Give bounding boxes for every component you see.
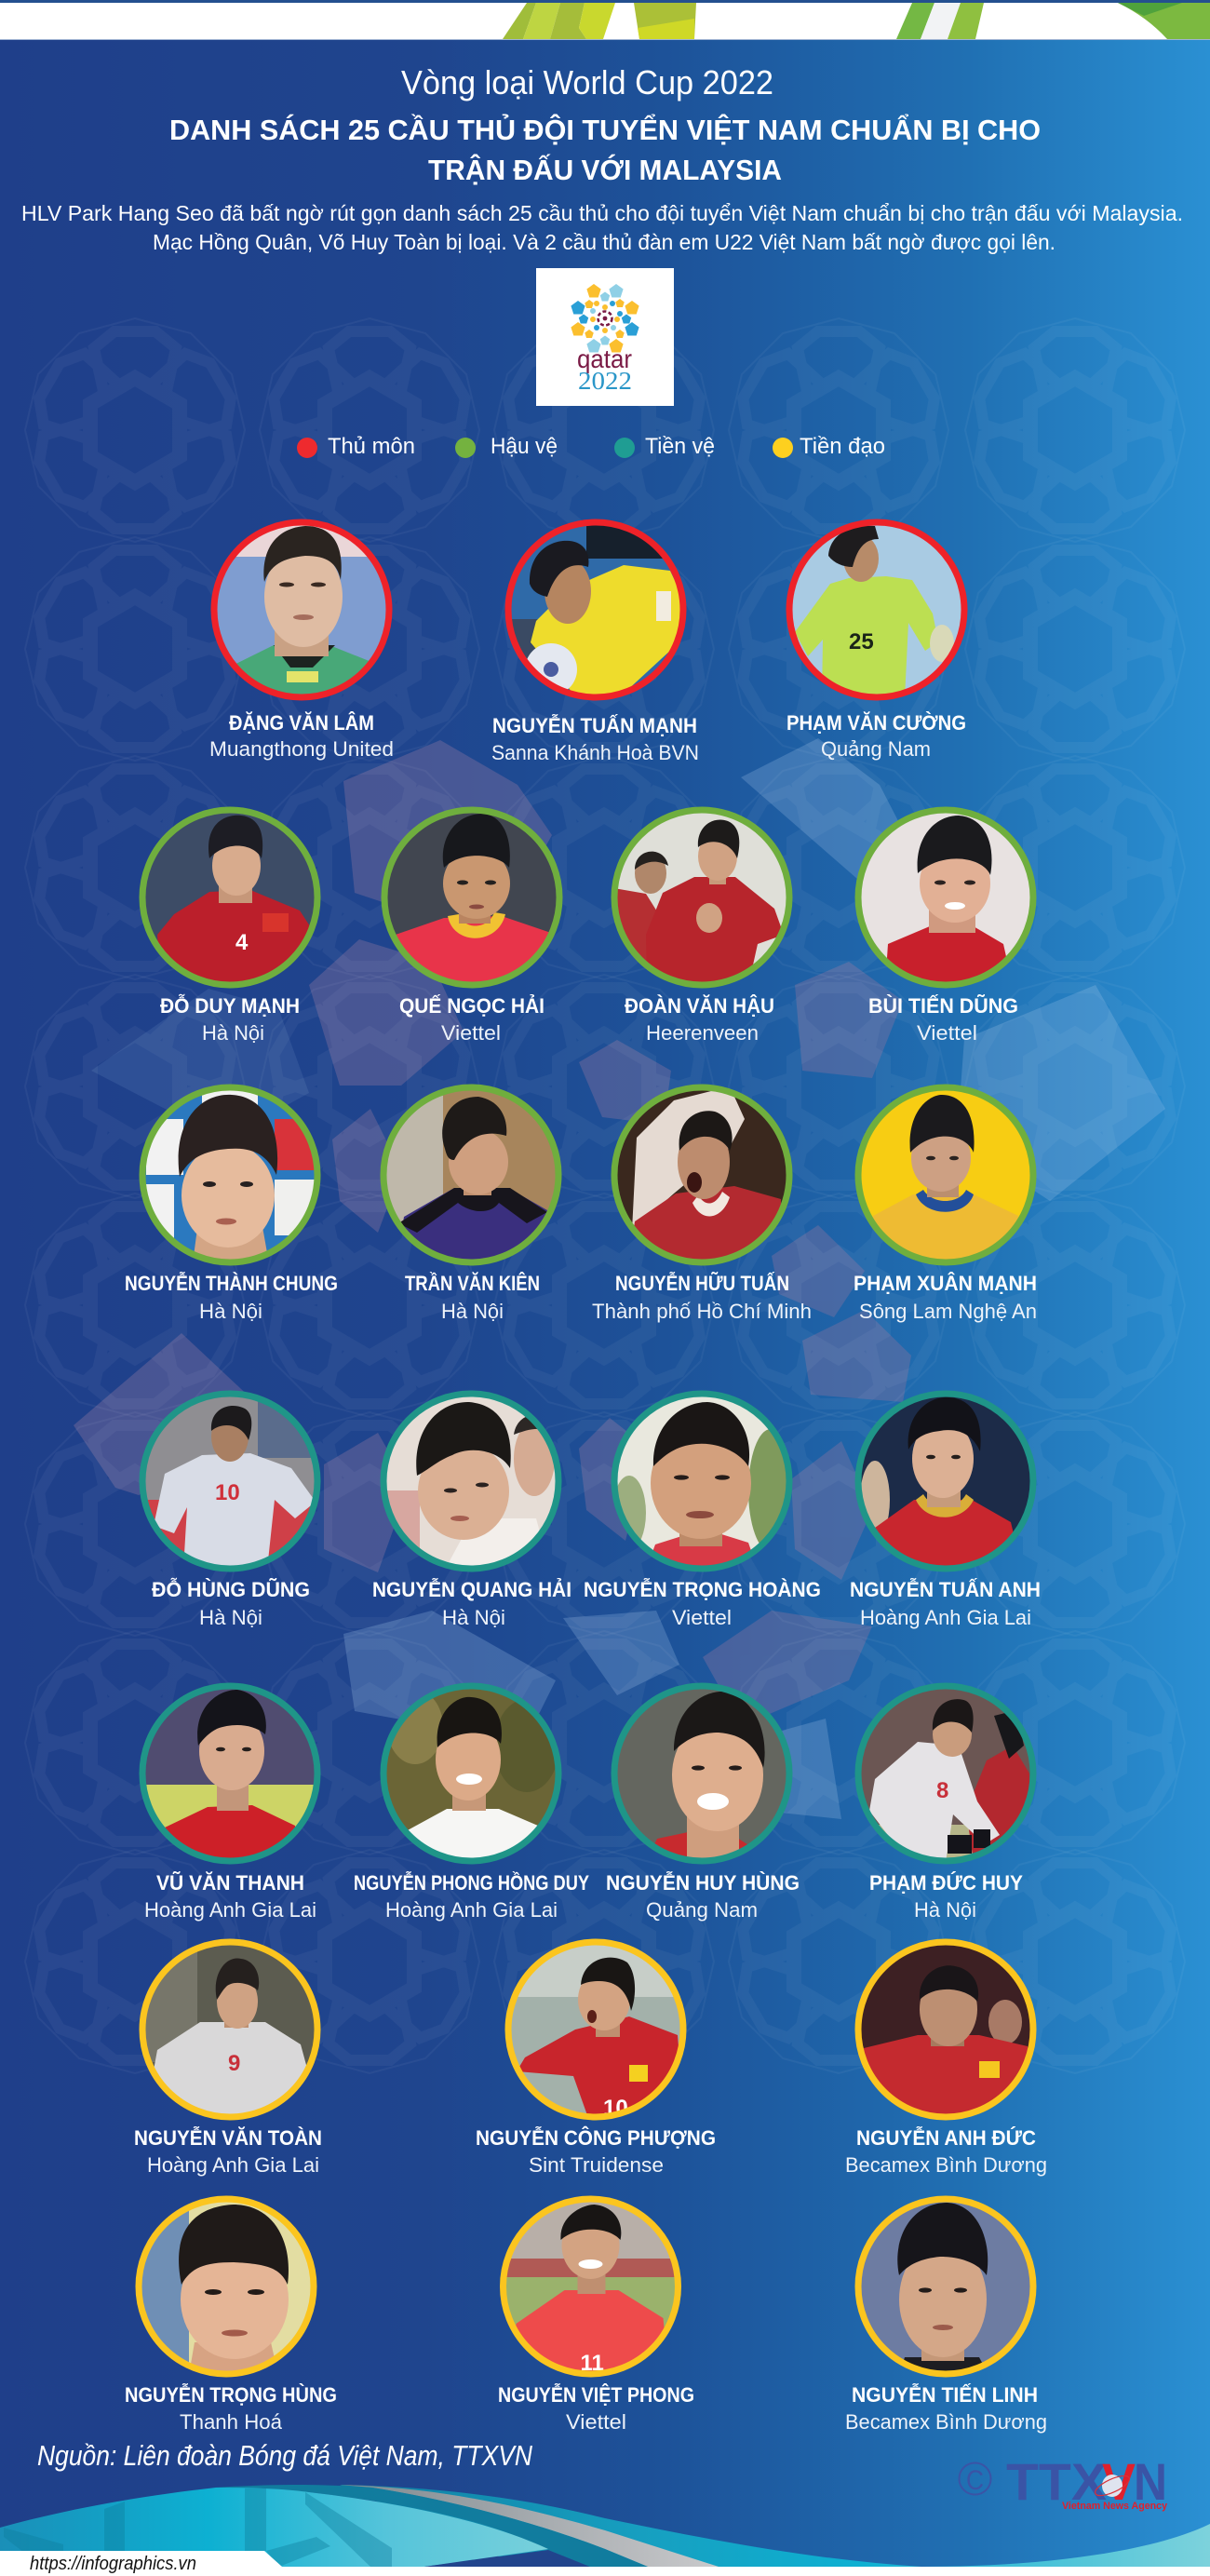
name: NGUYỄN TUẤN ANH xyxy=(850,1577,1041,1601)
player: Nguyễn Công Phượng xyxy=(476,1941,716,2177)
main heading: TRẬN ĐẤU VỚI MALAYSIA xyxy=(428,153,782,186)
photo: 8 xyxy=(936,1778,948,1803)
ring xyxy=(383,1087,558,1262)
name: ĐẶNG VĂN LÂM xyxy=(229,711,374,735)
intro paragraph xyxy=(21,201,1183,254)
ring xyxy=(383,1394,558,1569)
photo xyxy=(857,1685,1034,1862)
photo xyxy=(503,2198,679,2376)
club: Thành phố Hồ Chí Minh xyxy=(592,1300,812,1323)
player: Bùi Tiến Dũng xyxy=(857,809,1034,1045)
photo xyxy=(141,1685,318,1862)
club: Viettel xyxy=(917,1021,977,1045)
TTXVN logo xyxy=(959,2452,1168,2512)
Qatar 2022 logo: 2022 xyxy=(578,367,632,395)
photo xyxy=(612,1393,793,1570)
ring xyxy=(214,522,389,697)
main heading xyxy=(169,113,1041,186)
photo xyxy=(383,809,560,986)
ring xyxy=(614,1686,789,1861)
name: ĐOÀN VĂN HẬU xyxy=(625,994,774,1018)
name: QUẾ NGỌC HẢI xyxy=(399,994,544,1018)
main heading: DANH SÁCH 25 CẦU THỦ ĐỘI TUYỂN VIỆT NAM CHUẨN BỊ CHO xyxy=(169,113,1041,146)
TTXVN logo: TTX xyxy=(1006,2452,1107,2511)
name: NGUYỄN ANH ĐỨC xyxy=(856,2125,1036,2150)
legend: defender xyxy=(455,434,558,459)
player: Đỗ Hùng Dũng xyxy=(141,1393,318,1629)
club: Sông Lam Nghệ An xyxy=(859,1300,1037,1323)
source note: Nguồn: Liên đoàn Bóng đá Việt Nam, TTXVN xyxy=(37,2439,533,2472)
ring xyxy=(142,1087,317,1262)
photo xyxy=(383,1685,559,1862)
photo xyxy=(507,521,684,698)
photo xyxy=(857,2198,1034,2375)
club: Becamex Bình Dương xyxy=(845,2410,1047,2434)
Qatar 2022 logo: qatar xyxy=(577,344,632,373)
player: Nguyễn Trọng Hoàng xyxy=(584,1393,821,1629)
player: Nguyễn Phong Hồng Duy xyxy=(354,1685,589,1922)
name: NGUYỄN VIỆT PHONG xyxy=(498,2382,694,2407)
ring xyxy=(858,1087,1033,1262)
subtitle line: Vòng loại World Cup 2022 xyxy=(401,63,773,101)
club: Heerenveen xyxy=(646,1021,759,1045)
ring xyxy=(384,810,559,985)
name: TRẦN VĂN KIÊN xyxy=(405,1272,540,1295)
player: Phạm Văn Cường xyxy=(786,521,966,761)
ring xyxy=(858,810,1033,985)
ring xyxy=(858,2199,1033,2374)
faded logo watermark xyxy=(74,738,1165,1819)
club: Hà Nội xyxy=(202,1021,264,1045)
name: NGUYỄN QUANG HẢI xyxy=(372,1577,571,1601)
ring xyxy=(858,1942,1033,2117)
name: VŨ VĂN THANH xyxy=(156,1871,304,1895)
name: NGUYỄN THÀNH CHUNG xyxy=(125,1271,338,1295)
club: Hoàng Anh Gia Lai xyxy=(144,1898,316,1922)
legend: goalkeeper: Thủ môn xyxy=(328,434,415,459)
photo xyxy=(507,1941,684,2121)
background pattern xyxy=(25,318,1185,2073)
name: NGUYỄN VĂN TOÀN xyxy=(134,2125,322,2150)
club: Sint Truidense xyxy=(529,2153,664,2177)
photo xyxy=(383,1393,559,1570)
name: NGUYỄN HUY HÙNG xyxy=(606,1870,800,1895)
photo xyxy=(613,1086,790,1263)
photo: 10 xyxy=(603,2096,628,2121)
player: Nguyễn Tuấn Anh xyxy=(850,1393,1041,1629)
name: NGUYỄN TRỌNG HOÀNG xyxy=(584,1577,821,1601)
club: Viettel xyxy=(672,1606,732,1629)
photo xyxy=(213,521,390,698)
club: Hà Nội xyxy=(199,1606,262,1629)
photo: 10 xyxy=(215,1480,240,1505)
name: NGUYỄN CÔNG PHƯỢNG xyxy=(476,2125,716,2150)
name: PHẠM ĐỨC HUY xyxy=(869,1871,1023,1895)
player: Nguyễn Văn Toàn xyxy=(134,1941,322,2177)
ring xyxy=(858,1686,1033,1861)
ring xyxy=(614,810,789,985)
photo xyxy=(141,1086,318,1263)
footer strip with site URL: https://infographics.vn xyxy=(30,2554,196,2574)
TTXVN logo: Vietnam News Agency xyxy=(1062,2501,1168,2512)
club: Quảng Nam xyxy=(821,737,931,761)
intro paragraph: HLV Park Hang Seo đã bất ngờ rút gọn danh sách 25 cầu thủ cho đội tuyển Việt Nam chuẩn bị cho trận đấu với Malaysia. xyxy=(21,201,1183,225)
ring xyxy=(142,1942,317,2117)
legend: midfielder xyxy=(614,434,715,459)
photo xyxy=(141,1393,318,1570)
photo xyxy=(857,809,1034,986)
player: Nguyễn Anh Đức xyxy=(845,1941,1047,2177)
ring xyxy=(614,1394,789,1569)
player: Đoàn Văn Hậu xyxy=(613,809,790,1045)
player: Trần Văn Kiên xyxy=(383,1086,559,1323)
club: Hoàng Anh Gia Lai xyxy=(385,1898,558,1922)
photo xyxy=(383,1086,559,1263)
TTXVN logo: N xyxy=(1134,2452,1167,2511)
legend: defender: Hậu vệ xyxy=(491,434,558,459)
name: PHẠM VĂN CƯỜNG xyxy=(786,711,966,735)
club: Hoàng Anh Gia Lai xyxy=(147,2153,319,2177)
name: PHẠM XUÂN MẠNH xyxy=(854,1272,1037,1295)
player: Phạm Đức Huy xyxy=(857,1685,1034,1922)
name: ĐỖ DUY MẠNH xyxy=(160,993,300,1018)
club: Hà Nội xyxy=(199,1300,262,1323)
club: Hà Nội xyxy=(442,1606,505,1629)
player: Nguyễn Trọng Hùng xyxy=(125,2198,337,2434)
top white banner with green shapes xyxy=(0,0,1210,40)
photo: 9 xyxy=(228,2051,240,2076)
TTXVN logo: V xyxy=(1102,2452,1136,2511)
ring xyxy=(142,810,317,985)
player: Đặng Văn Lâm xyxy=(209,521,394,761)
photo: 25 xyxy=(849,629,874,654)
bottom wave decoration xyxy=(0,2485,1210,2567)
legend xyxy=(297,434,885,459)
player: Nguyễn Quang Hải xyxy=(372,1393,571,1629)
name: NGUYỄN PHONG HỒNG DUY xyxy=(354,1870,589,1895)
ring xyxy=(142,1686,317,1861)
name: BÙI TIẾN DŨNG xyxy=(868,994,1018,1018)
ring xyxy=(858,1394,1033,1569)
ring xyxy=(503,2199,678,2374)
club: Becamex Bình Dương xyxy=(845,2153,1047,2177)
photo xyxy=(141,1941,318,2118)
player: Nguyễn Hữu Tuấn xyxy=(592,1086,812,1323)
TTXVN logo: C xyxy=(966,2465,984,2496)
player: Phạm Xuân Mạnh xyxy=(854,1086,1037,1323)
club: Hà Nội xyxy=(441,1300,504,1323)
player: Nguyễn Việt Phong xyxy=(498,2198,694,2434)
player: Đỗ Duy Mạnh xyxy=(141,809,318,1045)
club: Quảng Nam xyxy=(646,1898,758,1922)
club: Viettel xyxy=(566,2410,626,2434)
footer strip with site URL xyxy=(0,2551,1210,2576)
club: Hà Nội xyxy=(914,1898,976,1922)
title xyxy=(169,63,1041,186)
ring xyxy=(139,2199,314,2374)
ring xyxy=(789,522,964,697)
photo: 4 xyxy=(235,930,249,955)
Qatar 2022 logo xyxy=(536,268,674,406)
name: NGUYỄN TRỌNG HÙNG xyxy=(125,2382,337,2407)
photo xyxy=(788,521,965,698)
photo: 11 xyxy=(581,2351,604,2376)
player: Nguyễn Huy Hùng xyxy=(606,1685,800,1922)
photo xyxy=(857,1086,1034,1263)
name: NGUYỄN TUẤN MẠNH xyxy=(492,713,697,737)
club: Sanna Khánh Hoà BVN xyxy=(491,741,699,764)
photo xyxy=(857,1941,1034,2118)
photo xyxy=(138,2198,315,2375)
player: Nguyễn Tuấn Mạnh xyxy=(491,521,699,764)
club: Hoàng Anh Gia Lai xyxy=(860,1606,1031,1629)
ring xyxy=(614,1087,789,1262)
legend: midfielder: Tiền vệ xyxy=(645,434,715,459)
ring xyxy=(508,1942,683,2117)
intro paragraph: Mạc Hồng Quân, Võ Huy Toàn bị loại. Và 2 cầu thủ đàn em U22 Việt Nam bất ngờ được gọi lên. xyxy=(153,230,1055,254)
legend: forward: Tiền đạo xyxy=(800,434,885,459)
ring xyxy=(383,1686,558,1861)
name: NGUYỄN TIẾN LINH xyxy=(852,2382,1038,2407)
ring xyxy=(142,1394,317,1569)
photo xyxy=(613,809,790,986)
name: NGUYỄN HỮU TUẤN xyxy=(615,1271,789,1295)
player: Nguyễn Tiến Linh xyxy=(845,2198,1047,2434)
player: Quế Ngọc Hải xyxy=(383,809,560,1045)
photo xyxy=(141,809,318,986)
player: Nguyễn Thành Chung xyxy=(125,1086,338,1323)
photo xyxy=(613,1685,790,1862)
photo xyxy=(857,1393,1034,1570)
club: Thanh Hoá xyxy=(180,2410,283,2434)
ring xyxy=(508,522,683,697)
club: Muangthong United xyxy=(209,737,394,761)
club: Viettel xyxy=(441,1021,501,1045)
name: ĐỖ HÙNG DŨNG xyxy=(152,1577,310,1601)
player: Vũ Văn Thanh xyxy=(141,1685,318,1922)
